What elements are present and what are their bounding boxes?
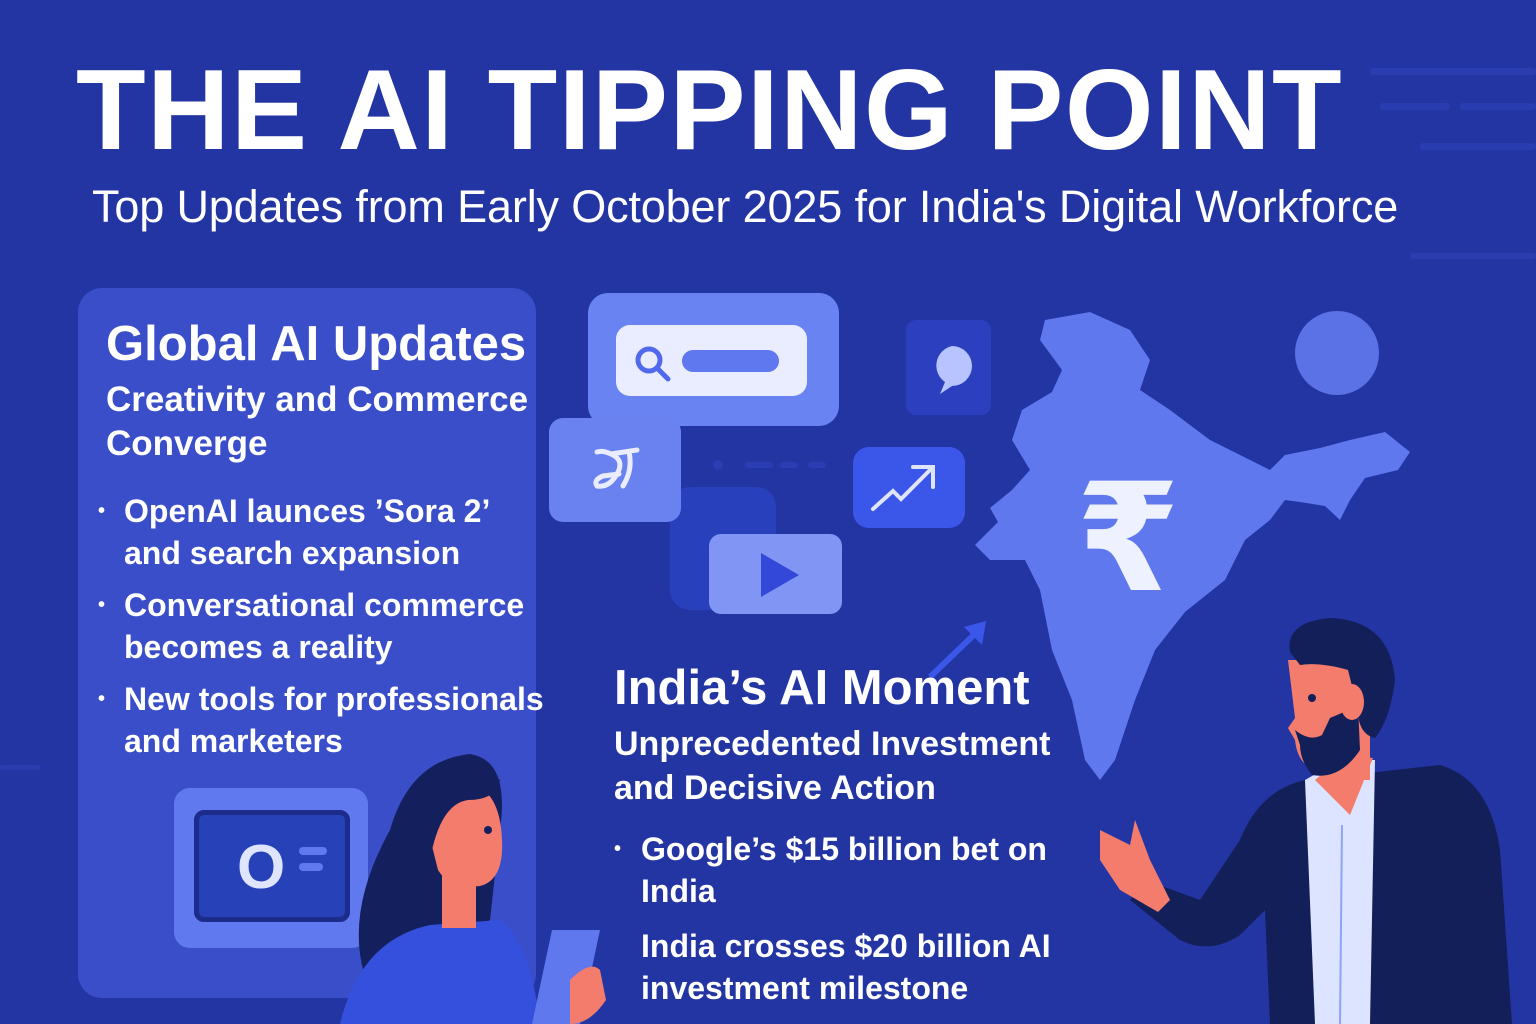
icon: tablet with O: O: [237, 833, 285, 902]
illustration: man presenting: [1100, 618, 1512, 1024]
icon: circle: [1295, 311, 1379, 395]
subheading: investment: and Decisive Action: [614, 769, 936, 807]
subheading: Creativity and Commerce: [106, 380, 528, 419]
bullet list: India: India: [641, 873, 716, 909]
arrow: [928, 621, 986, 678]
icon: search window: [588, 293, 839, 426]
bullet list: India: [614, 831, 1051, 1006]
bullet list: •: [98, 500, 105, 522]
bullet list: and search expansion: [124, 535, 460, 571]
panel: global AI updates: [78, 288, 536, 998]
heading: global AI updates: Global AI Updates: [106, 317, 526, 371]
map: India with rupee: ₹: [1076, 452, 1180, 626]
icon: play video: [709, 534, 842, 614]
subheading: investment: [614, 725, 1050, 807]
subheading: [106, 380, 528, 463]
icon: tablet with O: [174, 788, 368, 948]
bullet list: Conversational commerce: [124, 587, 524, 623]
heading: India's AI Moment: India’s AI Moment: [614, 661, 1030, 715]
bullet list: •: [98, 594, 105, 616]
bullet list: •: [98, 688, 105, 710]
title: THE AI TIPPING POINT: [76, 47, 1343, 174]
icon: sora logo: [549, 418, 681, 522]
bullet list: India: •: [614, 838, 621, 860]
bullet list: India: investment milestone: [641, 970, 968, 1006]
subheading: Converge: [106, 424, 267, 463]
bullet list: OpenAI launces ’Sora 2’: [124, 493, 490, 529]
bullet list: becomes a reality: [124, 629, 393, 665]
icon: trend arrow: [853, 447, 965, 528]
bullet list: New tools for professionals: [124, 681, 544, 717]
bullet list: India: Google’s $15 billion bet on: [641, 831, 1047, 867]
bullet list: and marketers: [124, 723, 343, 759]
icon: chat bubble: [906, 320, 991, 415]
bullet list: [98, 493, 544, 759]
subheading: investment: Unprecedented Investment: [614, 725, 1050, 763]
subtitle: Top Updates from Early October 2025 for India's Digital Workforce: [92, 181, 1398, 232]
illustration: woman with phone: [340, 754, 606, 1024]
bullet list: India: India crosses $20 billion AI: [641, 928, 1051, 964]
